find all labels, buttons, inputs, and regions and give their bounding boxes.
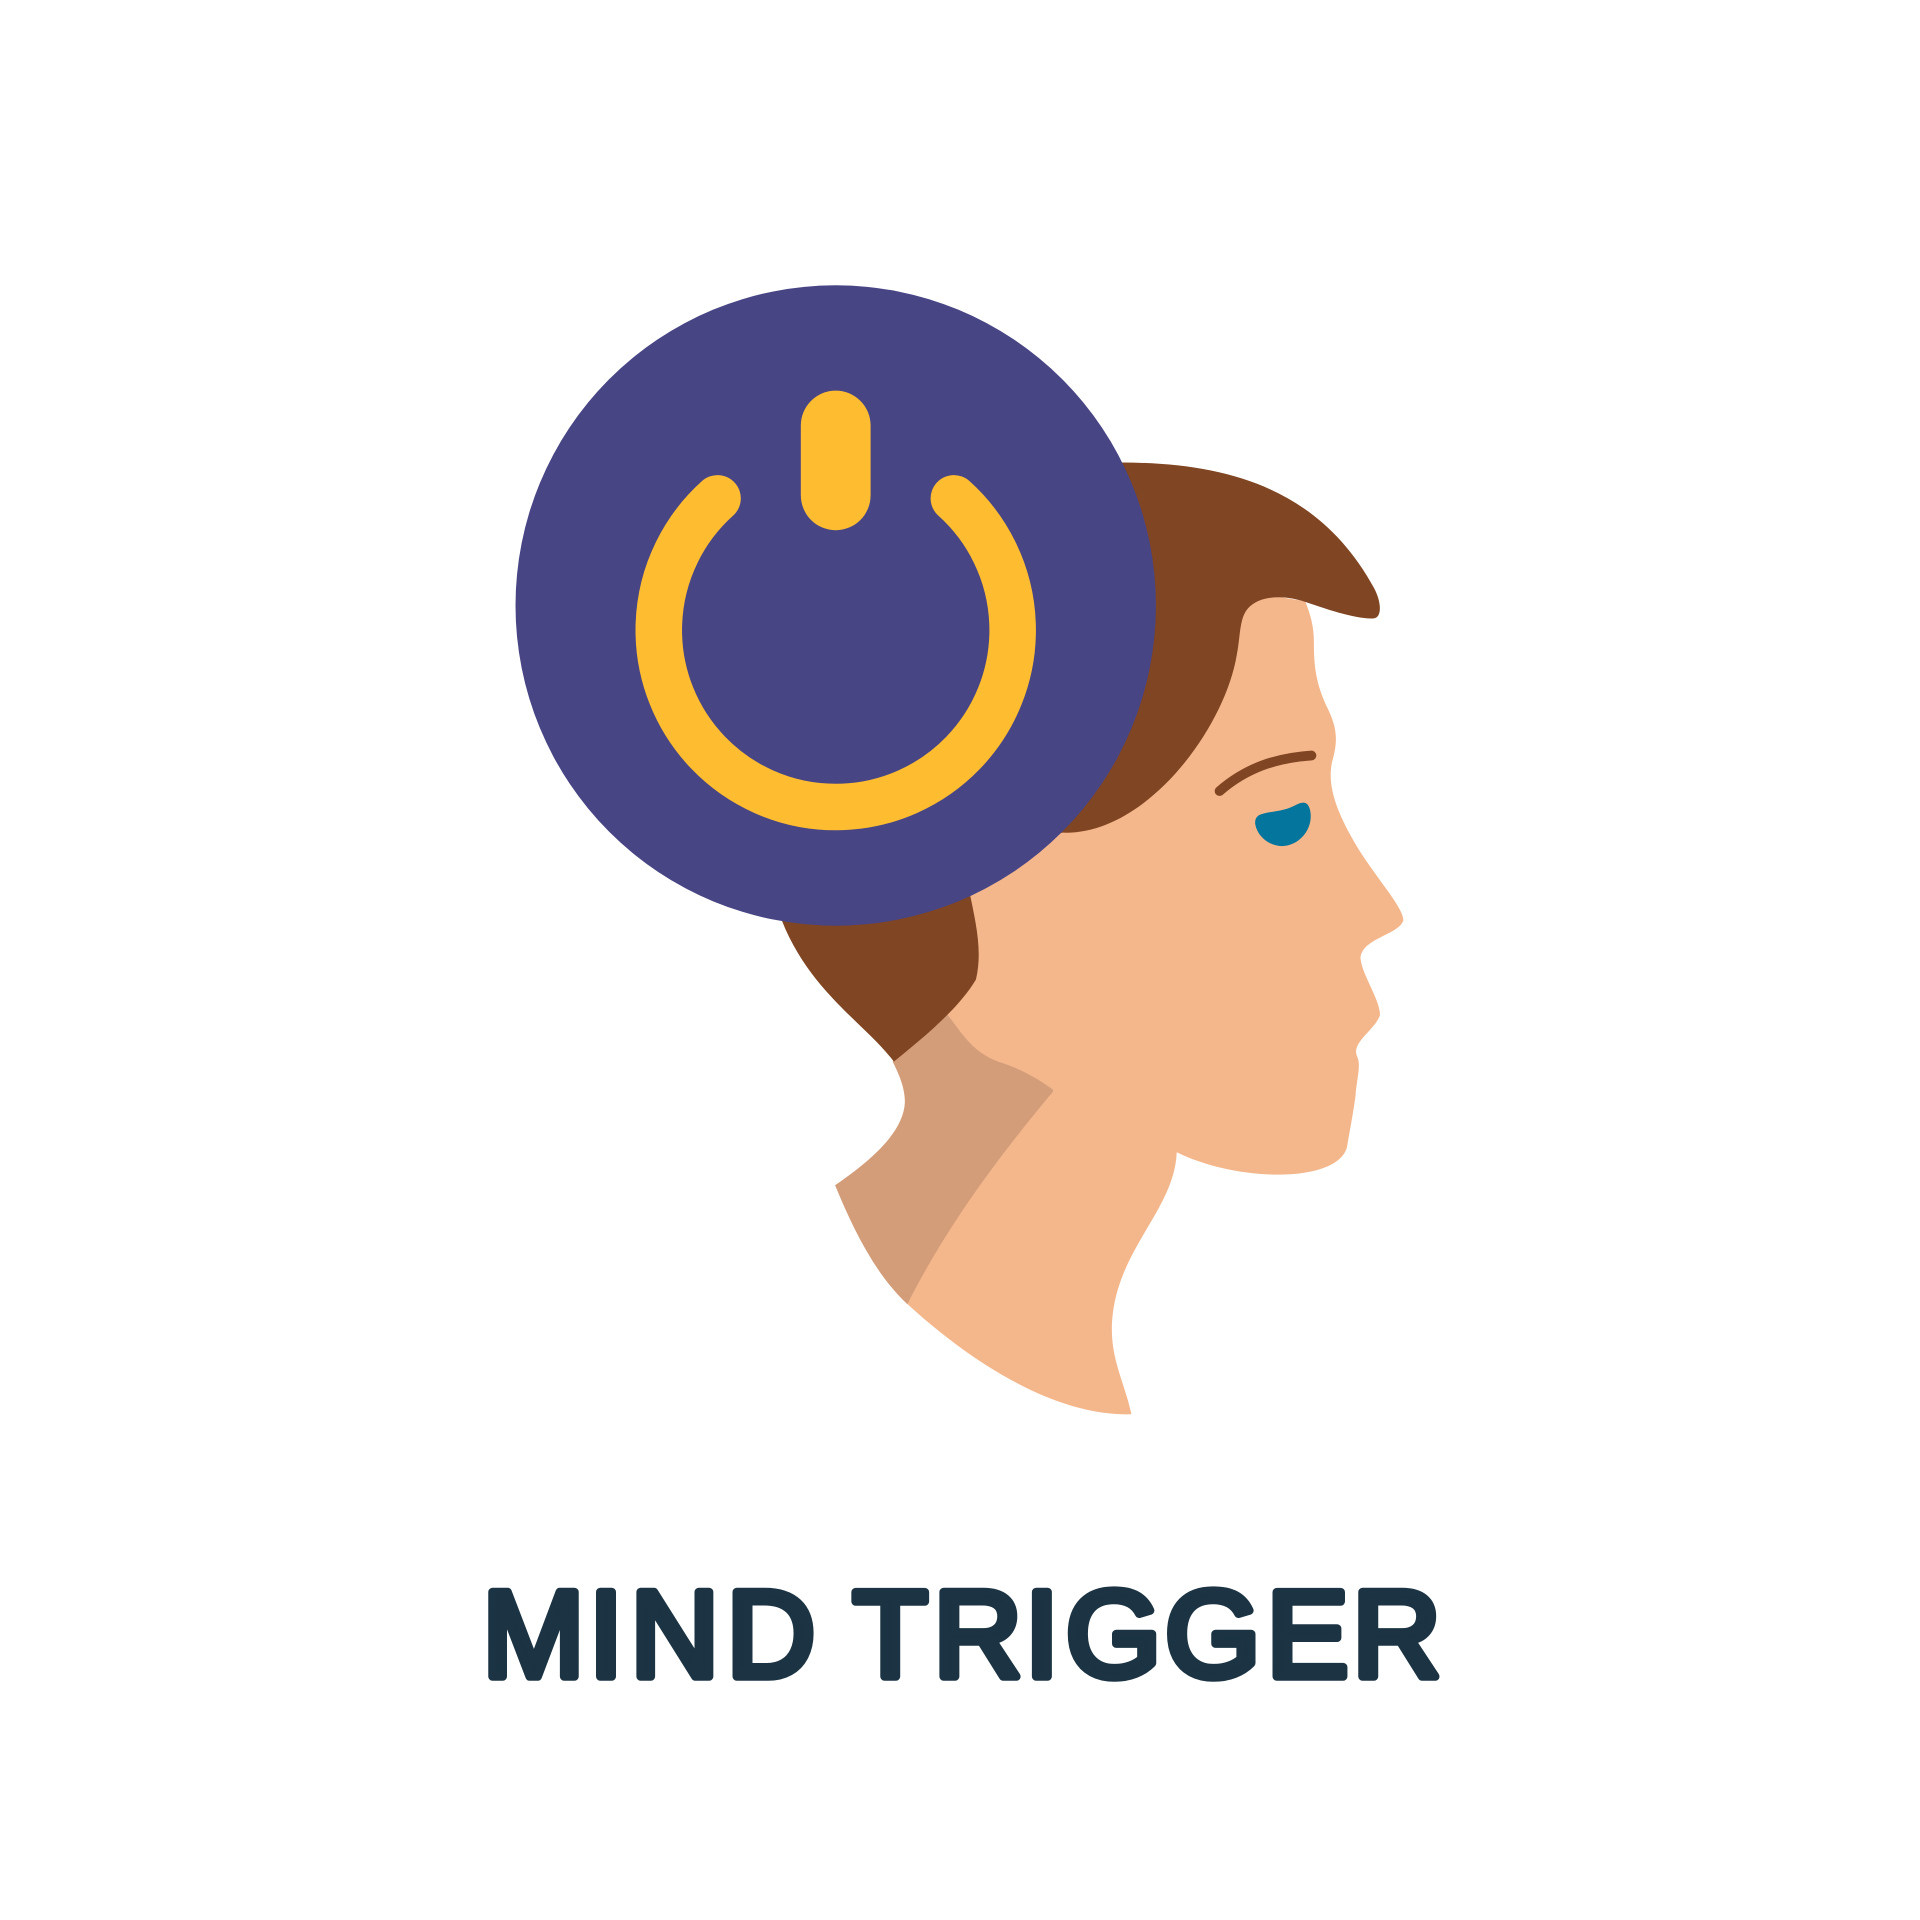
- neck shadow: [835, 1014, 1053, 1304]
- figure: head in profile: [779, 463, 1403, 1414]
- hair: lower back: [779, 882, 979, 1062]
- hair: top and fringe: [980, 463, 1380, 845]
- badge circle: [516, 285, 1156, 926]
- title: MIND TRIGGER: [482, 1565, 1441, 1702]
- eyebrow: [1220, 756, 1311, 791]
- icon: power button badge: [516, 285, 1156, 926]
- power symbol bar: [801, 391, 871, 530]
- teardrop eye: [1255, 803, 1311, 846]
- power symbol ring: [659, 498, 1013, 807]
- face and neck skin: [857, 588, 1403, 1414]
